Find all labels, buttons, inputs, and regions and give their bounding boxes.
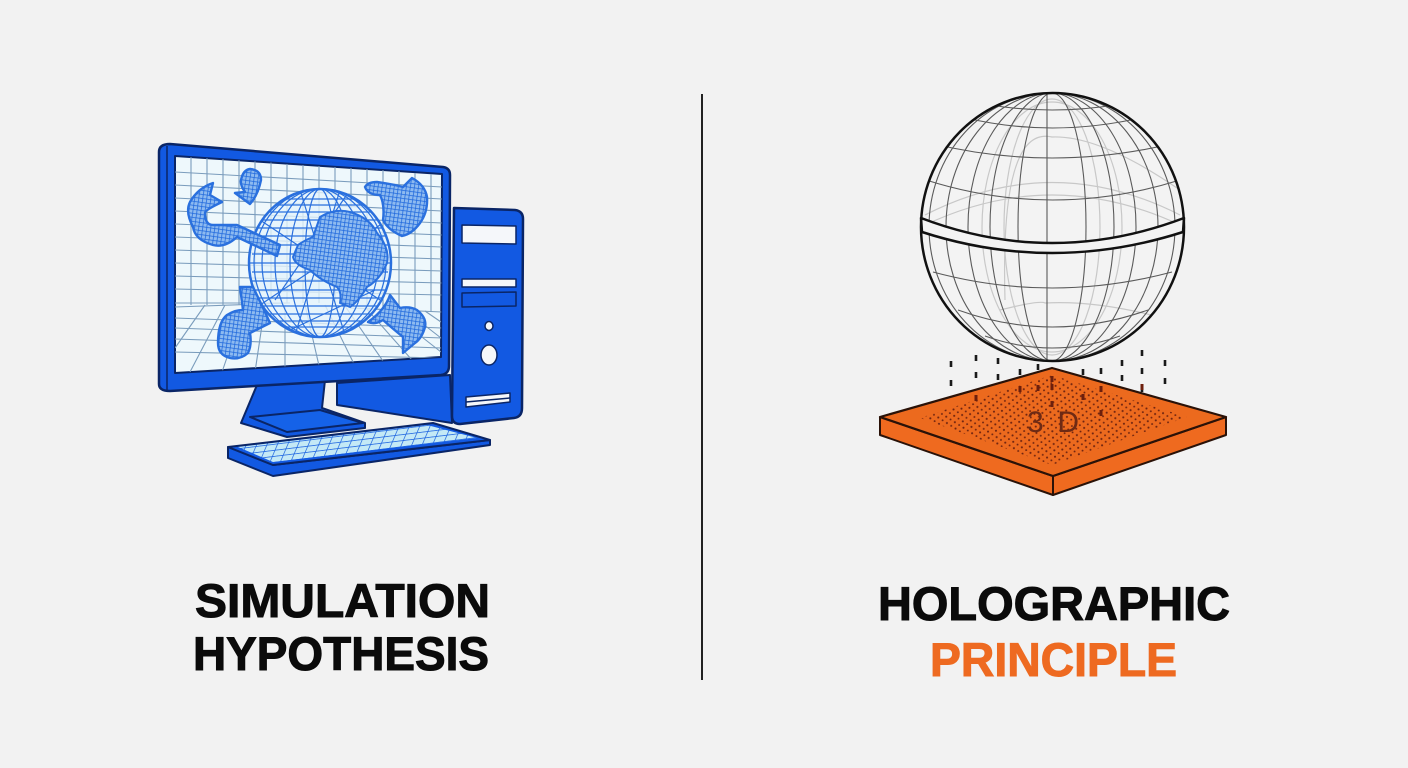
- title: holographic principle: HOLOGRAPHIC: [878, 577, 1230, 630]
- dashes over slab: [976, 376, 1142, 416]
- monitor bezel: [159, 144, 450, 391]
- 3D label: 3 D: [1027, 406, 1079, 439]
- slab top face: [880, 368, 1226, 476]
- tower case: [337, 208, 523, 424]
- title: holographic principle: [878, 577, 1230, 686]
- faint inner surface lines: [925, 99, 1180, 355]
- mesh blob: bottom right: [368, 295, 425, 353]
- vertical divider: [701, 94, 703, 680]
- orange holographic slab: [880, 368, 1226, 495]
- continent mesh on globe: [293, 211, 388, 307]
- title: simulation hypothesis: HYPOTHESIS: [193, 627, 489, 680]
- icon: wireframe sphere: [921, 93, 1184, 361]
- monitor stand: [241, 380, 365, 437]
- sphere meridians and parallels: [926, 93, 1180, 361]
- slab left face: [880, 417, 1053, 495]
- projection dashes above slab: [951, 350, 1165, 392]
- mesh blob: bottom left: [218, 287, 270, 358]
- icon: desktop computer with wireframe globe: [159, 144, 523, 476]
- stipple boundary dots: [920, 375, 1187, 465]
- mesh blob: top right: [365, 178, 427, 236]
- monitor screen: [175, 156, 442, 373]
- sphere equator band: [921, 218, 1184, 253]
- title: holographic principle: PRINCIPLE: [930, 633, 1177, 686]
- screen grid room: [175, 157, 442, 372]
- mesh blob: hook top left: [188, 183, 280, 256]
- monitor side edge: [166, 146, 168, 390]
- slab right face: [1053, 417, 1226, 495]
- title: simulation hypothesis: SIMULATION: [195, 574, 490, 627]
- mesh blob: drop: [235, 169, 261, 204]
- wireframe globe: [249, 189, 391, 337]
- title: simulation hypothesis: [193, 574, 490, 680]
- keyboard: [228, 423, 490, 476]
- sphere outline: [921, 93, 1184, 361]
